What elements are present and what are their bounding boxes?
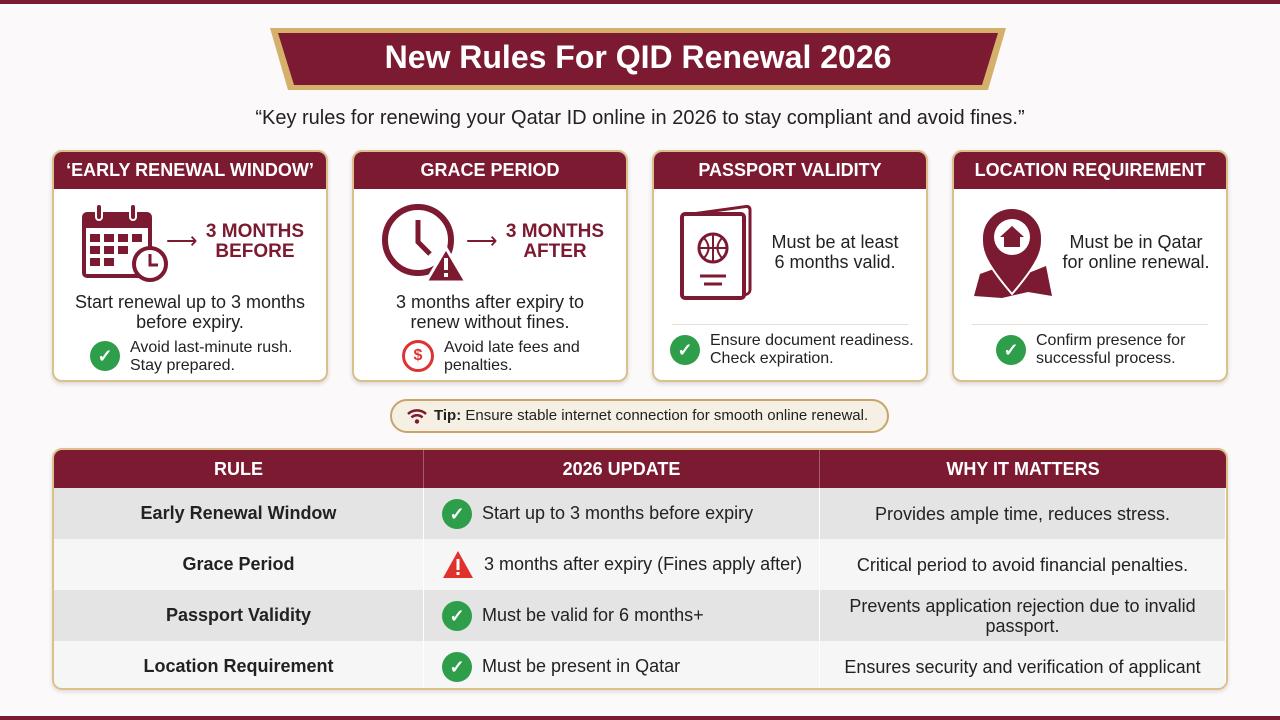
panel: passport validity: Check expiration. — [710, 350, 834, 367]
panel: location requirement: LOCATION REQUIREMENT — [975, 160, 1205, 180]
panel: early renewal window: 3 MONTHS — [206, 221, 304, 242]
icon: location pin map — [974, 209, 1052, 298]
comparison table: RULE — [214, 458, 263, 478]
panel: passport validity: ✓ — [677, 340, 693, 360]
panel: passport validity: Must be at least — [771, 232, 899, 252]
tip callout — [390, 399, 889, 433]
comparison table: Ensures security and verification of applicant — [844, 656, 1201, 676]
comparison table: Start up to 3 months before expiry — [482, 503, 753, 523]
panel: passport validity: PASSPORT VALIDITY — [698, 160, 882, 180]
panel: passport validity: 6 months valid. — [774, 252, 896, 272]
comparison table — [52, 448, 1228, 690]
icon: passport — [680, 204, 752, 300]
tip callout: Tip: Ensure stable internet connection for smooth online renewal. — [434, 407, 868, 424]
comparison table: Provides ample time, reduces stress. — [875, 504, 1170, 524]
panel: grace period: Avoid late fees and — [444, 339, 580, 356]
panel: grace period: ⟶ — [466, 228, 498, 253]
arrow: ⟶ — [166, 228, 198, 253]
panel: passport validity — [652, 150, 928, 382]
comparison table: ✓ — [449, 606, 465, 626]
comparison table: Prevents application rejection due to invalid — [849, 596, 1196, 616]
title banner: New Rules For QID Renewal 2026 — [385, 39, 891, 75]
icon: no fines: $ — [414, 347, 422, 364]
panel: early renewal window: ✓ — [97, 346, 113, 366]
icon: calendar — [82, 205, 168, 282]
panel: grace period: penalties. — [444, 357, 512, 374]
comparison table: Early Renewal Window — [141, 503, 336, 523]
panel: passport validity: Ensure document readiness. — [710, 332, 914, 349]
icon: clock warning — [382, 204, 464, 280]
comparison table: Critical period to avoid financial penalties. — [857, 554, 1188, 574]
panel: location requirement: Must be in Qatar — [1069, 232, 1203, 252]
panel: grace period: renew without fines. — [410, 312, 570, 332]
comparison table: 3 months after expiry (Fines apply after) — [484, 554, 802, 574]
subtitle: “Key rules for renewing your Qatar ID online in 2026 to stay compliant and avoid fines.” — [255, 107, 1025, 129]
comparison table: passport. — [985, 616, 1060, 636]
panel: grace period: 3 MONTHS — [506, 221, 604, 242]
panel: grace period: GRACE PERIOD — [420, 160, 560, 180]
panel: grace period: 3 months after expiry to — [396, 292, 584, 312]
title banner — [270, 28, 1006, 90]
comparison table: Must be valid for 6 months+ — [482, 605, 704, 625]
comparison table: ✓ — [449, 504, 465, 524]
panel: early renewal window: before expiry. — [136, 312, 244, 332]
panel: early renewal window: Start renewal up to 3 months — [75, 292, 305, 312]
panel: early renewal window: BEFORE — [215, 241, 295, 262]
panel: location requirement: for online renewal. — [1062, 252, 1210, 272]
comparison table: WHY IT MATTERS — [946, 459, 1100, 479]
panel: location requirement: Confirm presence for — [1036, 332, 1185, 349]
panel: early renewal window: Stay prepared. — [130, 357, 235, 374]
comparison table: Grace Period — [182, 554, 295, 574]
comparison table: Must be present in Qatar — [482, 656, 680, 676]
panel: location requirement: successful process. — [1036, 350, 1176, 367]
icon: no fines — [402, 340, 434, 372]
comparison table: Location Requirement — [143, 656, 334, 676]
panel: location requirement — [952, 150, 1228, 382]
panel: early renewal window: Avoid last-minute rush. — [130, 339, 292, 356]
comparison table: Passport Validity — [166, 605, 311, 625]
panel: grace period — [352, 150, 628, 382]
comparison table: 2026 UPDATE — [563, 458, 680, 478]
comparison table: ✓ — [449, 656, 465, 676]
panel: grace period: AFTER — [523, 241, 587, 262]
panel: location requirement: ✓ — [1003, 340, 1019, 360]
panel: early renewal window — [52, 150, 328, 382]
panel: early renewal window: ‘EARLY RENEWAL WINDOW’ — [66, 160, 314, 180]
icon: wifi — [407, 409, 427, 424]
